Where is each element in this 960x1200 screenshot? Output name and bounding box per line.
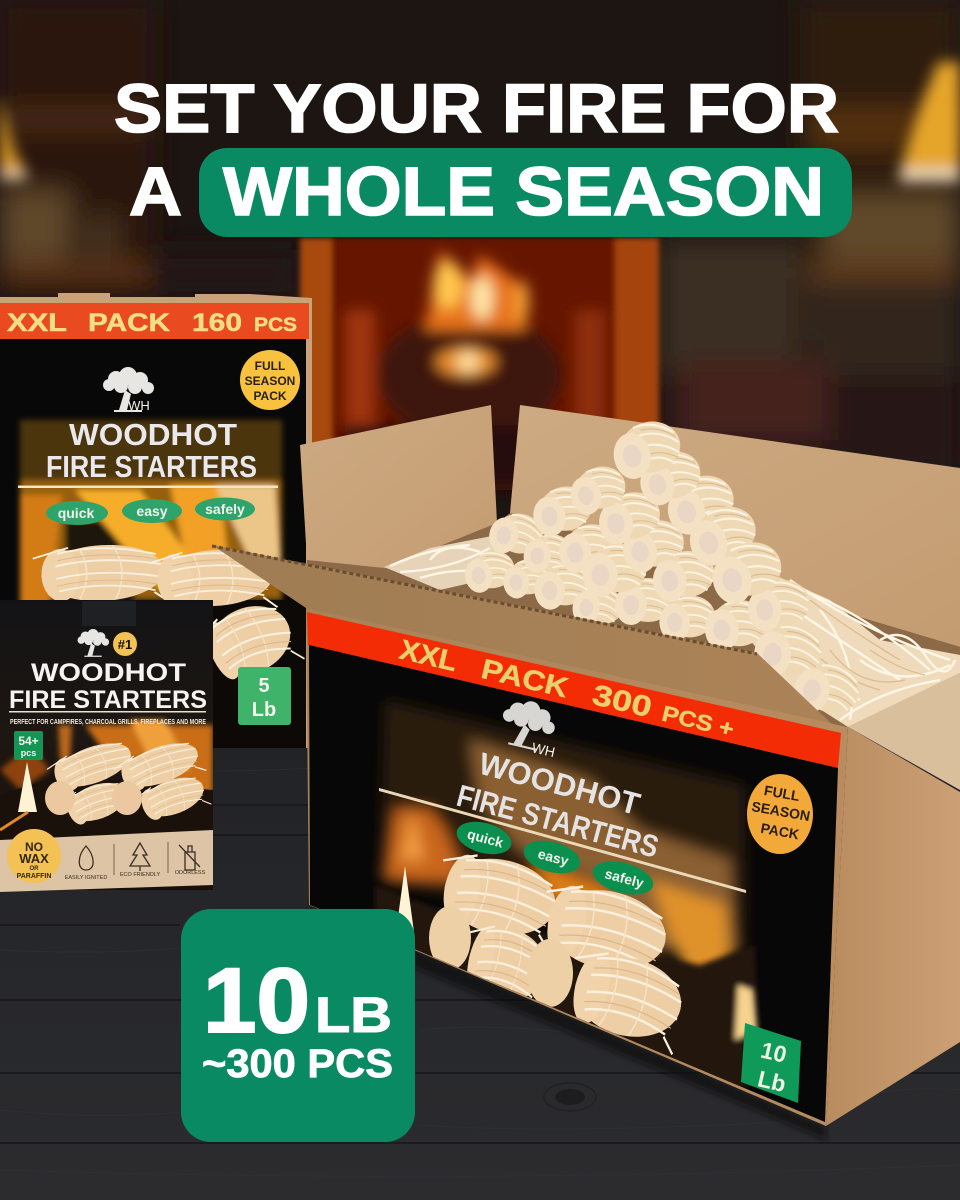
panel season badge [747, 774, 813, 854]
small box feature labels: EASILY IGNITED [65, 875, 107, 881]
front cardboard panel [306, 608, 848, 1126]
small box feature icons [79, 842, 200, 875]
back box logo tree: WH [128, 398, 150, 413]
panel fire art [375, 700, 760, 1110]
back box cardboard [0, 293, 312, 748]
back box 5 Lb tag: Lb [252, 699, 276, 721]
badge background [181, 909, 415, 1142]
small box feature labels [65, 870, 206, 881]
back box season badge [240, 350, 300, 410]
badge: 10 LB ~300 PCS [181, 909, 415, 1142]
back box 5 Lb tag [238, 667, 291, 725]
back left flap [300, 405, 497, 568]
large open box [212, 405, 960, 1140]
back box label: XXL PACK 160 PCS: 160 [192, 309, 242, 337]
small box no wax badge [7, 829, 61, 883]
panel logo tree: WH [530, 739, 557, 760]
back box season badge: FULL [255, 359, 285, 373]
badge unit: LB [315, 987, 392, 1043]
panel title: WOODHOT [475, 746, 644, 822]
label: XXL PACK 300 PCS +: 300 [589, 679, 655, 724]
back box fire art [0, 420, 306, 750]
large open box: FIRE STARTERS [453, 778, 662, 865]
small box no wax badge: NO [25, 840, 43, 854]
pile of fire starters [462, 417, 864, 720]
panel oval tags: quick [466, 826, 505, 851]
back box black panel [0, 339, 306, 745]
panel season badge: PACK [759, 820, 800, 842]
small box feature labels: ODORLESS [175, 870, 206, 876]
label: XXL PACK 300 PCS +: PACK [478, 653, 571, 703]
small box feature labels: ECO FRIENDLY [120, 872, 160, 878]
panel 10 Lb tag: 10 [758, 1037, 789, 1068]
back box season badge: SEASON [245, 374, 295, 388]
small box logo: #1 [118, 637, 132, 652]
box shadow on floor [312, 905, 826, 1140]
panel 10 Lb tag [741, 1023, 801, 1103]
headline pill [199, 148, 852, 237]
small box no wax badge: PARAFFIN [17, 873, 51, 880]
badge number: 10 [203, 950, 310, 1052]
back box logo tree [103, 367, 154, 413]
back box: 160 pcs [0, 293, 312, 750]
back box 5 Lb tag: 5 [258, 675, 270, 697]
headline highlighted words: WHOLE SEASON [223, 154, 824, 231]
back box: 160 pcs: FIRE STARTERS [46, 449, 257, 484]
panel 10 Lb tag: Lb [755, 1065, 788, 1097]
back box label: XXL PACK 160 PCS: PACK [88, 309, 170, 337]
headline [114, 71, 852, 237]
small box no wax badge: OR [30, 866, 39, 872]
panel season badge: SEASON [750, 798, 811, 824]
interior of box [306, 513, 960, 727]
back right flap [510, 405, 960, 647]
small box: 54+ pcs [0, 600, 213, 892]
wood wool filling [384, 535, 960, 727]
black printed panel [309, 645, 838, 1122]
small box 54+ tag: 54+ [18, 734, 39, 748]
right open flap [848, 673, 960, 790]
small box subtitle: PERFECT FOR CAMPFIRES, CHARCOAL GRILLS, FIREPLACES AND MORE [10, 719, 206, 726]
right side panel [826, 727, 960, 1126]
back box season badge: PACK [253, 389, 287, 403]
front flap [212, 545, 835, 727]
back box orange band [0, 303, 309, 339]
badge pieces: ~300 PCS [202, 1042, 393, 1086]
small box no wax badge: WAX [19, 851, 49, 866]
small box logo [78, 629, 137, 657]
floor: dark wooden planks [0, 745, 960, 1200]
small box beige footer [0, 830, 213, 892]
label: XXL PACK 300 PCS +: PCS + [660, 701, 736, 742]
headline word A: A [129, 154, 182, 231]
panel logo tree [497, 696, 560, 760]
small box title: WOODHOT [31, 659, 186, 687]
background: blurred fireplace room [0, 0, 960, 760]
panel season badge: FULL [763, 782, 801, 804]
red band [307, 612, 841, 768]
small box 54+ tag [14, 731, 43, 760]
back box oval tags [46, 498, 255, 525]
back box oval tags: easy [136, 503, 168, 519]
small box tab [82, 601, 136, 626]
panel oval tags: safely [603, 865, 646, 891]
back box label: XXL PACK 160 PCS: PCS [254, 315, 297, 336]
back box label: XXL PACK 160 PCS: XXL [7, 309, 67, 337]
back box title: WOODHOT [69, 417, 237, 452]
panel oval tags [453, 816, 657, 901]
panel oval tags: easy [536, 845, 571, 869]
label: XXL PACK 300 PCS + [396, 634, 738, 744]
small box: 54+ pcs: FIRE STARTERS [9, 686, 207, 714]
small box fire art [0, 720, 213, 840]
headline line 1: SET YOUR FIRE FOR [114, 71, 839, 148]
label: XXL PACK 300 PCS +: XXL [397, 634, 460, 677]
back box label: XXL PACK 160 PCS [7, 309, 297, 337]
back box oval tags: quick [58, 505, 94, 521]
small box 54+ tag: pcs [21, 748, 36, 758]
back box oval tags: safely [205, 501, 245, 517]
